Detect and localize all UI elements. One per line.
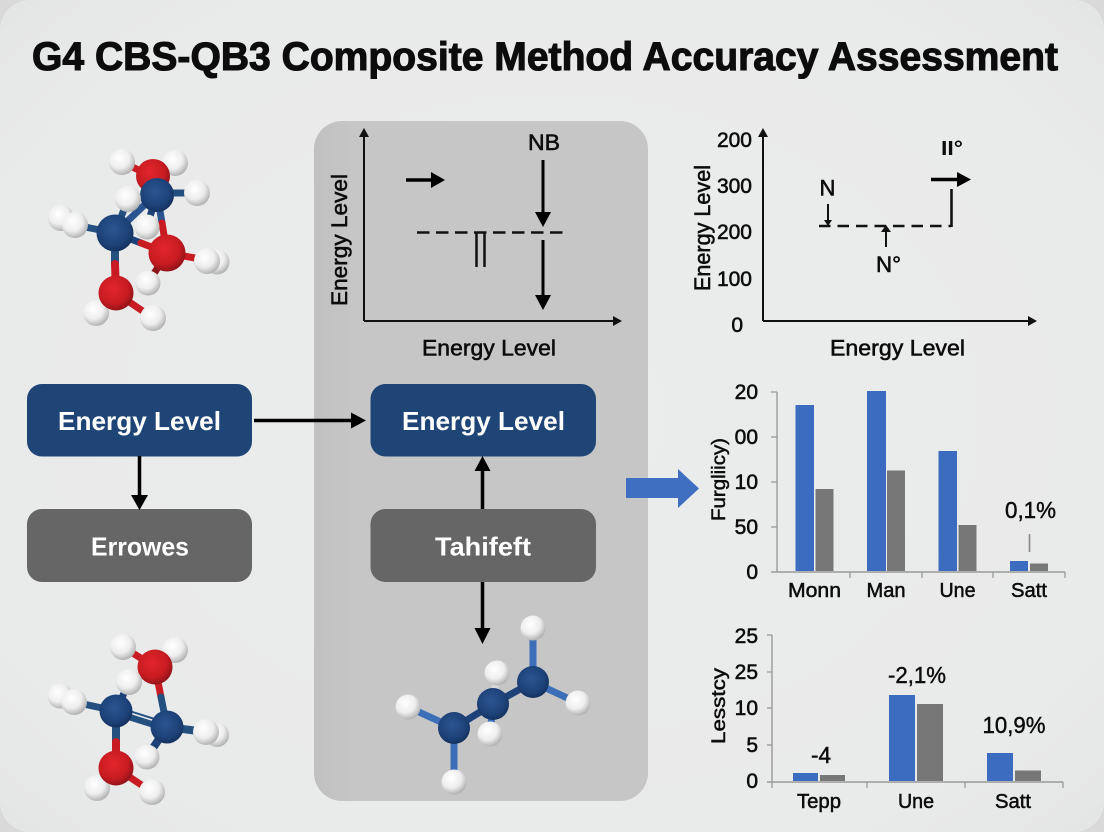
box: Tahifeft [370, 509, 596, 582]
chart: bottom bar chart: 0 [746, 770, 758, 793]
chart: middle bar chart: 10 [735, 471, 758, 494]
chart: right energy diagram: 100 [717, 268, 752, 291]
arrow: Tahifeft up to Energy Level [474, 456, 490, 509]
chart: panel energy diagram [327, 128, 622, 360]
chart: middle bar chart: 00 [735, 426, 758, 449]
chart: bottom bar chart: Satt [995, 791, 1031, 813]
icon: panel molecule [396, 616, 590, 794]
chart: middle bar chart: 0 [746, 561, 758, 584]
box: panel Energy Level [370, 384, 596, 456]
chart: middle bar chart: 0,1% [1005, 497, 1056, 523]
chart: bottom bar chart: Tepp [797, 791, 841, 813]
chart: middle bar chart [709, 381, 1065, 602]
chart: right energy diagram: II° [941, 138, 963, 160]
chart: bottom bar chart: 25 [735, 625, 758, 648]
chart: bottom bar chart: 25 [735, 661, 758, 684]
chart: panel energy diagram: Energy Level [327, 174, 352, 306]
box: Errowes: Errowes [91, 532, 189, 562]
box: panel Energy Level: Energy Level [402, 406, 565, 436]
chart: bottom bar chart: Une [898, 791, 934, 813]
panel: central process [314, 121, 648, 801]
chart: panel energy diagram: NB [528, 130, 560, 155]
chart: middle bar chart: Monn [788, 580, 841, 602]
arrow: Tahifeft down to molecule [474, 582, 490, 644]
chart: right energy diagram: 200 [717, 129, 752, 152]
chart: right energy diagram: N [820, 176, 835, 200]
chart: middle bar chart: 20 [735, 381, 758, 404]
arrow: Energy Level to Errowes [131, 456, 148, 510]
arrow: panel to charts [626, 469, 699, 508]
chart: bottom bar chart: -2,1% [888, 662, 946, 688]
title: G4 CBS-QB3 Composite Method Accuracy Assessment [32, 35, 1058, 79]
box: left Energy Level [27, 384, 252, 456]
chart: middle bar chart: Satt [1011, 580, 1047, 602]
chart: right energy diagram: 200 [717, 221, 752, 244]
chart: middle bar chart: Man [866, 580, 906, 602]
chart: bottom bar chart [709, 625, 1063, 813]
chart: bottom bar chart: 10,9% [982, 712, 1046, 738]
chart: panel energy diagram: Energy Level [422, 336, 556, 360]
chart: right energy diagram: Energy Level [690, 165, 715, 291]
chart: right energy diagram: Energy Level [830, 336, 965, 360]
icon: bottom-left molecule [48, 634, 229, 805]
icon: top-left molecule [48, 149, 230, 331]
box: Tahifeft: Tahifeft [435, 532, 531, 562]
box: Errowes [27, 509, 252, 582]
chart: right energy diagram [690, 128, 1037, 360]
chart: middle bar chart: 50 [735, 516, 758, 539]
chart: middle bar chart: Furgliicy) [709, 438, 730, 521]
chart: bottom bar chart: Lesstcy [709, 667, 730, 744]
chart: bottom bar chart: 10 [735, 697, 758, 720]
chart: bottom bar chart: -4 [811, 742, 831, 768]
chart: right energy diagram: 0 [731, 314, 743, 337]
arrow: left box to panel box [254, 412, 366, 428]
chart: right energy diagram: N° [876, 252, 901, 277]
chart: bottom bar chart: 5 [746, 734, 758, 757]
chart: middle bar chart: Une [940, 580, 976, 602]
box: left Energy Level: Energy Level [58, 406, 221, 436]
chart: right energy diagram: 300 [717, 175, 752, 198]
